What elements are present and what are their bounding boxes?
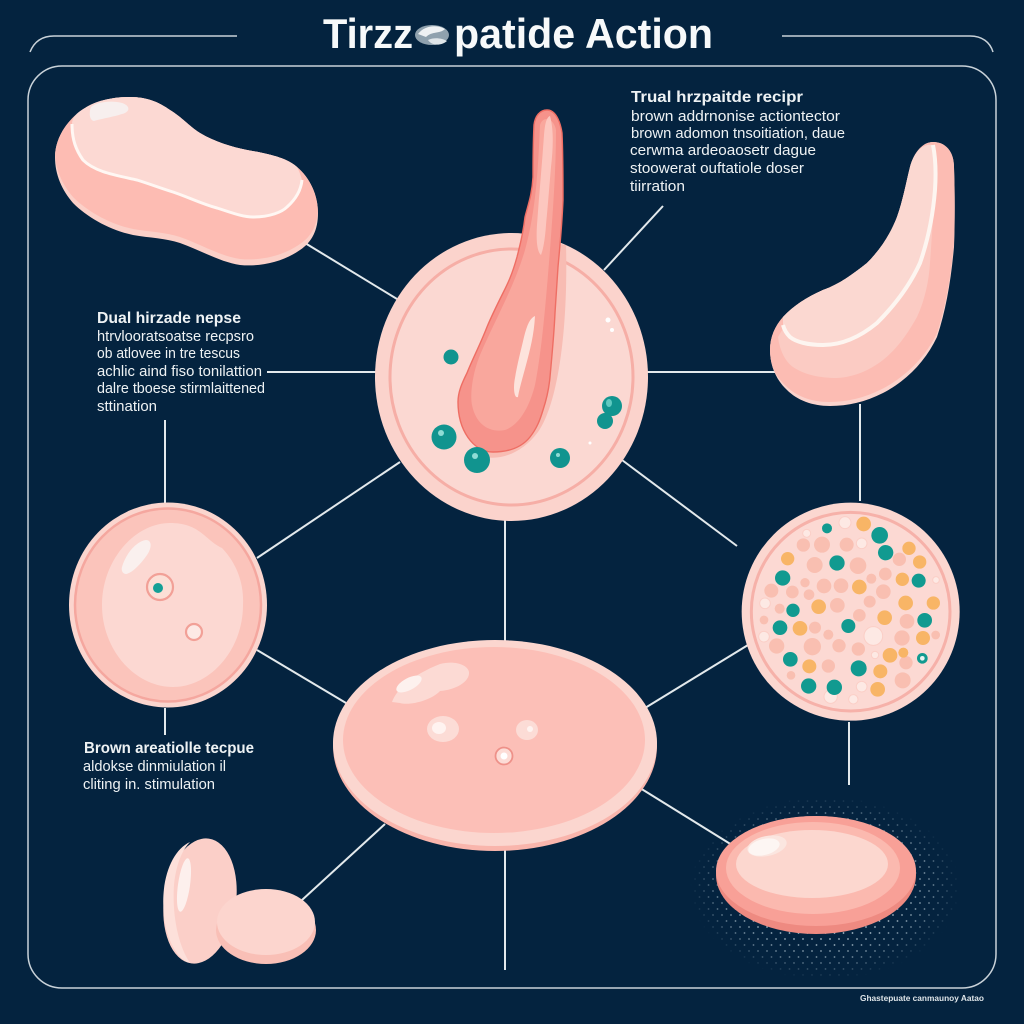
text block: top right: [630, 89, 845, 195]
title: patide Action: [454, 10, 713, 57]
text block: bottom left: aldokse dinmiulation il: [83, 759, 226, 775]
organ: right cell cluster circle: [742, 503, 960, 721]
text block: bottom left: Brown areatiolle tecpue: [84, 740, 254, 757]
organ: left cell circle: [69, 502, 267, 708]
footer credit: Ghastepuate canmaunoy Aatao: [860, 993, 984, 1003]
text block: top right: cerwma ardeoaosetr dague: [630, 143, 816, 159]
organ: centre circle with elongated tongue and teal particles: [375, 110, 648, 521]
text block: left: dalre tboese stirmlaittened: [97, 381, 265, 397]
text block: left: Dual hirzade nepse: [97, 310, 241, 327]
organ: top left kidney-shaped: [55, 91, 318, 265]
teal cells: [773, 523, 932, 695]
organ: right curved: [767, 138, 955, 406]
salmon cells: [760, 537, 940, 688]
text block: bottom left: [83, 740, 254, 793]
organ: bottom left capsule pair: [156, 834, 316, 968]
text block: top right: brown addrnonise actiontector: [631, 109, 840, 125]
text block: top right: Trual hrzpaitde recipr: [631, 89, 803, 106]
teal particles: [432, 350, 622, 473]
text block: left: ob atlovee in tre tescus: [97, 346, 240, 362]
text block: left: htrvlooratsoatse recpsro: [97, 329, 254, 345]
organ: bottom right lens with dotted halo: [694, 800, 956, 976]
title: Tirzz: [323, 10, 413, 57]
text block: left: sttination: [97, 399, 157, 415]
orange cells: [781, 517, 940, 697]
text block: left: [97, 310, 265, 415]
connector lines: [165, 206, 860, 970]
text block: top right: tiirration: [630, 179, 685, 195]
text block: top right: stoowerat ouftatiole doser: [630, 161, 804, 177]
organ: bottom centre ellipse: [333, 640, 657, 851]
text block: bottom left: cliting in. stimulation: [83, 777, 215, 793]
text block: top right: brown adomon tnsoitiation, daue: [631, 126, 845, 142]
title: [323, 10, 713, 57]
text block: left: achlic aind fiso tonilattion: [97, 364, 262, 380]
pale cell outlines: [759, 517, 939, 704]
